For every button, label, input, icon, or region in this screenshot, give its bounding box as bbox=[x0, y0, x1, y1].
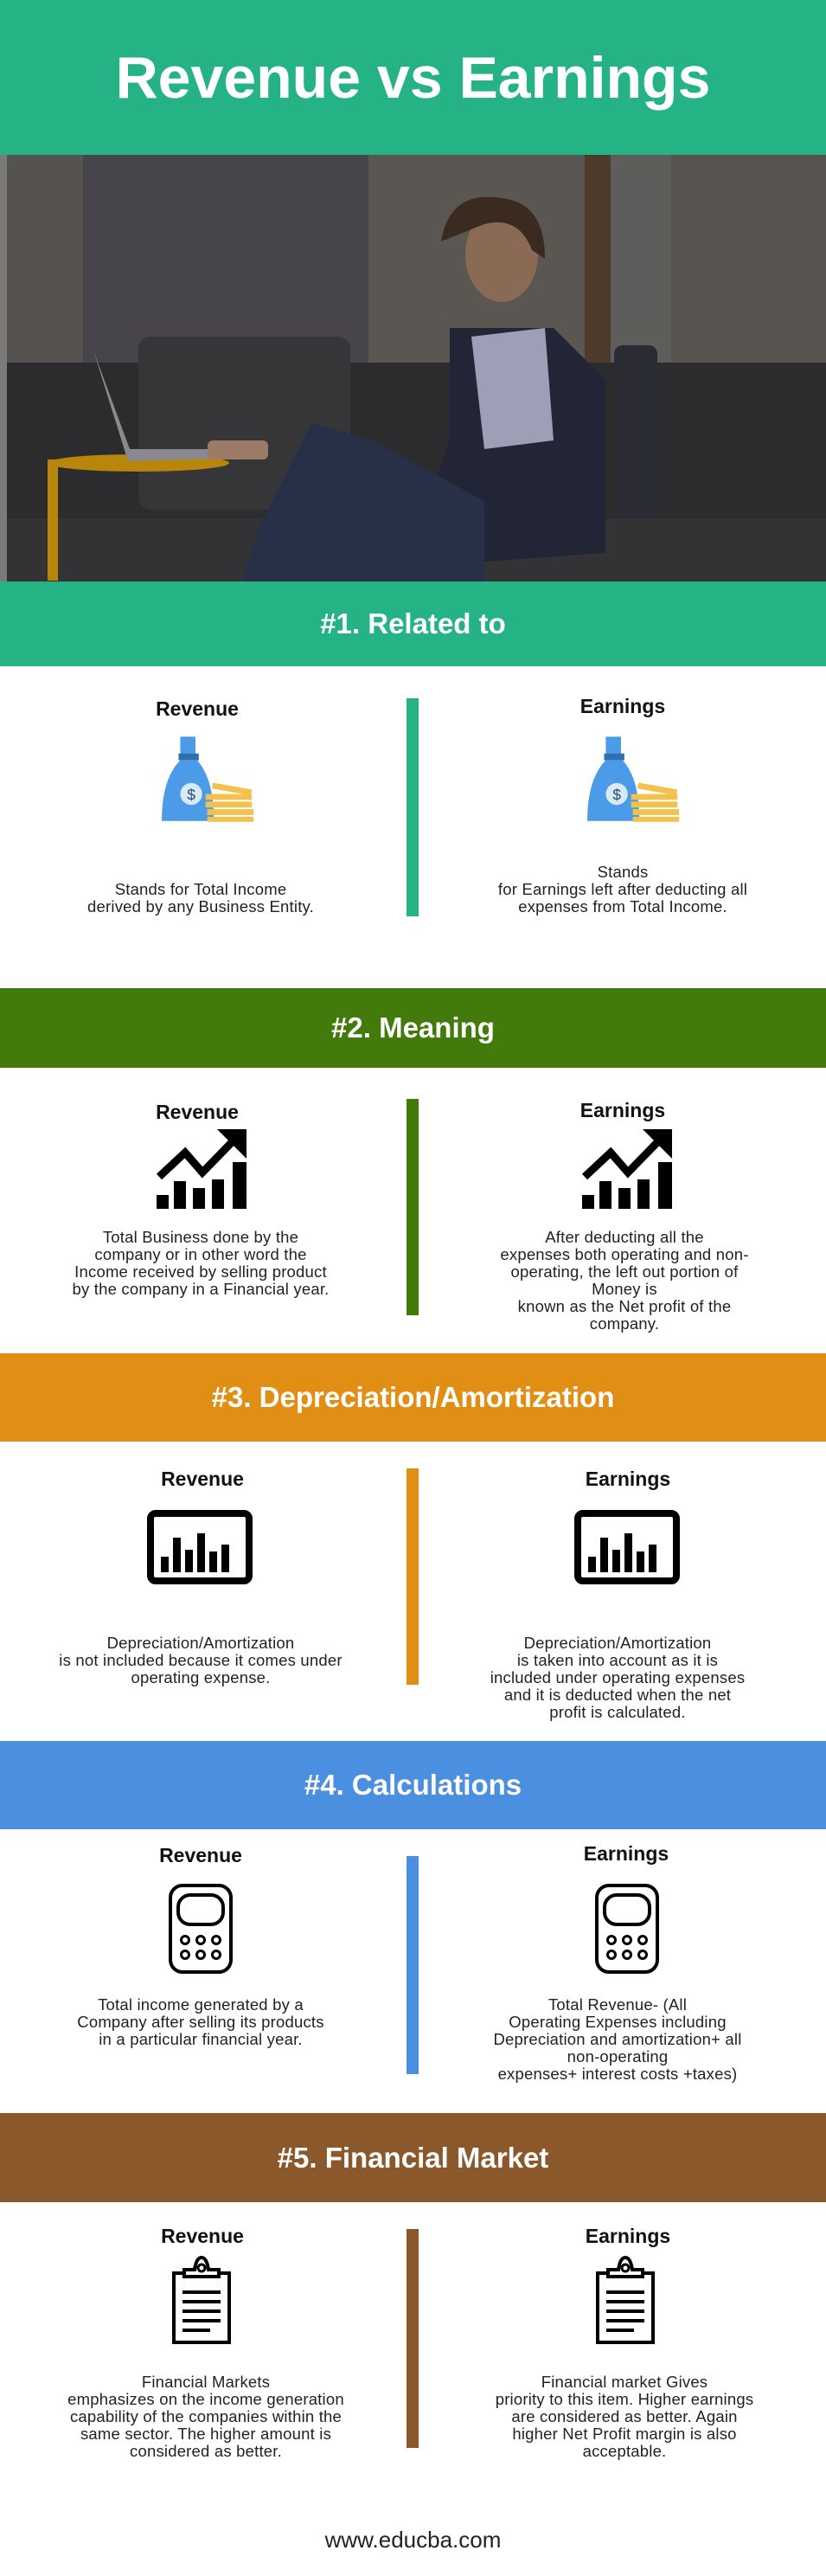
text: earnings: Depreciation/Amortization bbox=[524, 1634, 711, 1652]
icon: clipboard bbox=[596, 2256, 655, 2344]
footer: website: www.educba.com bbox=[325, 2527, 501, 2553]
icon: dashboard chart bbox=[574, 1510, 680, 1584]
text: earnings: known as the Net profit of the bbox=[518, 1297, 731, 1315]
text: earnings: are considered as better. Again bbox=[511, 2407, 738, 2425]
band: #3 Depreciation/Amortization bbox=[0, 1353, 826, 1442]
panel: related to bbox=[87, 695, 747, 916]
text: earnings: expenses both operating and non- bbox=[500, 1245, 749, 1263]
heading: earnings: Earnings bbox=[586, 1468, 670, 1490]
band: #5 Financial Market: #5. Financial Market bbox=[278, 2141, 548, 2174]
icon: money bag bbox=[162, 736, 254, 822]
heading: earnings: Earnings bbox=[584, 1842, 669, 1865]
text: revenue: derived by any Business Entity. bbox=[87, 897, 314, 915]
band: #1 Related to: #1. Related to bbox=[320, 607, 506, 639]
text: earnings: and it is deducted when the net bbox=[504, 1686, 731, 1704]
text: revenue: Income received by selling product bbox=[74, 1262, 327, 1281]
icon: calculator bbox=[169, 1884, 233, 1974]
text: earnings: profit is calculated. bbox=[549, 1703, 686, 1721]
text: revenue: emphasizes on the income generation bbox=[67, 2390, 344, 2408]
heading: earnings: Earnings bbox=[580, 695, 665, 717]
text: earnings: expenses+ interest costs +taxes) bbox=[498, 2065, 737, 2083]
text: revenue bbox=[87, 880, 314, 915]
text: earnings bbox=[493, 1995, 742, 2083]
text: earnings: Money is bbox=[592, 1280, 657, 1298]
panel: financial market bbox=[67, 2225, 753, 2460]
text: earnings: Depreciation and amortization+ all bbox=[493, 2030, 742, 2048]
text: revenue: Total Business done by the bbox=[103, 1228, 298, 1246]
text: earnings: higher Net Profit margin is also bbox=[512, 2425, 737, 2443]
text: revenue: by the company in a Financial year. bbox=[73, 1280, 329, 1298]
band: #5 Financial Market bbox=[0, 2113, 826, 2202]
text: revenue: in a particular financial year. bbox=[99, 2030, 303, 2048]
panel: depreciation bbox=[59, 1468, 745, 1721]
band: #1 Related to bbox=[0, 581, 826, 666]
icon: money bag bbox=[587, 736, 680, 822]
text: earnings bbox=[496, 2373, 753, 2460]
icon: dashboard chart bbox=[147, 1510, 253, 1584]
text: earnings: company. bbox=[590, 1314, 659, 1333]
band: #2 Meaning: #2. Meaning bbox=[331, 1012, 495, 1044]
text: earnings bbox=[500, 1228, 749, 1333]
text: earnings: Operating Expenses including bbox=[509, 2013, 727, 2031]
heading: revenue: Revenue bbox=[156, 697, 239, 720]
icon: growth chart bbox=[157, 1129, 247, 1209]
text: earnings: Financial market Gives bbox=[541, 2373, 708, 2391]
divider bbox=[407, 698, 419, 916]
band: #4 Calculations: #4. Calculations bbox=[304, 1769, 522, 1801]
heading: revenue: Revenue bbox=[161, 1468, 244, 1490]
text: revenue: is not included because it comes under bbox=[59, 1651, 343, 1669]
heading: earnings: Earnings bbox=[580, 1099, 665, 1121]
band: #2 Meaning bbox=[0, 988, 826, 1068]
title band bbox=[0, 0, 826, 155]
divider bbox=[407, 1856, 419, 2074]
text: earnings bbox=[490, 1634, 745, 1721]
icon: growth chart bbox=[582, 1129, 672, 1209]
text: earnings: is taken into account as it is bbox=[517, 1651, 718, 1669]
text: earnings: expenses from Total Income. bbox=[518, 897, 727, 915]
icon: money bag: $ bbox=[187, 786, 195, 803]
divider bbox=[407, 1099, 419, 1315]
text: earnings: non-operating bbox=[567, 2047, 668, 2065]
text: earnings: Stands bbox=[598, 863, 648, 881]
heading: earnings: Earnings bbox=[586, 2225, 670, 2247]
panel: calculations bbox=[77, 1842, 742, 2083]
text: revenue: Depreciation/Amortization bbox=[107, 1634, 294, 1652]
text: revenue bbox=[59, 1634, 343, 1686]
text: revenue: operating expense. bbox=[131, 1668, 270, 1686]
text: revenue: Financial Markets bbox=[142, 2373, 270, 2391]
heading: revenue: Revenue bbox=[159, 1844, 242, 1866]
text: earnings bbox=[498, 863, 747, 915]
text: earnings: included under operating expenses bbox=[490, 1668, 745, 1686]
title band: Revenue vs Earnings bbox=[116, 45, 710, 111]
panel: meaning bbox=[73, 1099, 749, 1333]
band: #3 Depreciation/Amortization: #3. Depreciation/Amortization bbox=[212, 1381, 614, 1413]
text: earnings: priority to this item. Higher earnings bbox=[496, 2390, 753, 2408]
icon: clipboard bbox=[172, 2256, 231, 2344]
text: revenue: Total income generated by a bbox=[98, 1995, 304, 2014]
text: revenue: Stands for Total Income bbox=[115, 880, 286, 898]
divider bbox=[407, 2229, 419, 2448]
text: earnings: After deducting all the bbox=[545, 1228, 704, 1246]
icon: money bag: $ bbox=[612, 786, 621, 803]
band: #4 Calculations bbox=[0, 1741, 826, 1829]
text: revenue bbox=[77, 1995, 324, 2048]
text: revenue bbox=[67, 2373, 344, 2460]
text: revenue: capability of the companies within the bbox=[70, 2407, 342, 2425]
heading: revenue: Revenue bbox=[161, 2225, 244, 2247]
text: earnings: operating, the left out portion of bbox=[511, 1262, 738, 1281]
heading: revenue: Revenue bbox=[156, 1101, 239, 1123]
divider bbox=[407, 1468, 419, 1685]
text: earnings: acceptable. bbox=[583, 2442, 666, 2460]
text: revenue bbox=[73, 1228, 329, 1298]
text: revenue: company or in other word the bbox=[94, 1245, 307, 1263]
text: earnings: Total Revenue- (All bbox=[548, 1995, 687, 2014]
icon: calculator bbox=[595, 1884, 659, 1974]
text: earnings: for Earnings left after deducting all bbox=[498, 880, 747, 898]
photo: man with laptop on sofa bbox=[0, 155, 826, 581]
text: revenue: same sector. The higher amount is bbox=[80, 2425, 331, 2443]
text: revenue: Company after selling its products bbox=[77, 2013, 324, 2031]
text: revenue: considered as better. bbox=[130, 2442, 282, 2460]
